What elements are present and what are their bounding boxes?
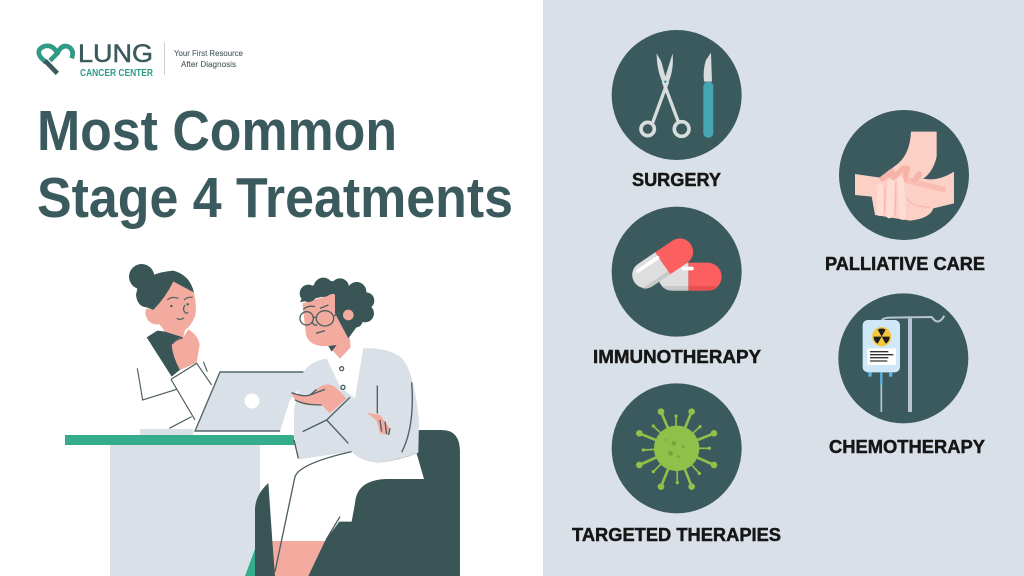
- patient hands: [291, 385, 390, 435]
- label: CHEMOTHERAPY: [829, 437, 985, 457]
- icon: heart logo: [39, 46, 73, 73]
- IV pole: [881, 316, 944, 412]
- lower hand: [855, 172, 954, 221]
- illustration: consultation scene: [65, 264, 460, 576]
- logo tagline: Your First Resource: [174, 48, 243, 58]
- radiation symbol: [872, 327, 891, 346]
- treatment: immunotherapy: [593, 207, 761, 367]
- treatment: chemotherapy: [829, 293, 985, 457]
- label: SURGERY: [632, 170, 721, 190]
- patient neck and face: [302, 293, 351, 359]
- patient buttons: [340, 367, 345, 389]
- doctor: [129, 264, 212, 435]
- patient skirt: [268, 452, 424, 541]
- doctor shirt: [147, 331, 183, 377]
- title: Most Common: [37, 99, 397, 163]
- icon: capsules: [612, 207, 742, 337]
- icon: virus: [612, 383, 742, 513]
- logo tagline: After Diagnosis: [181, 59, 236, 69]
- patient hair: [300, 278, 374, 338]
- doctor face: [145, 282, 196, 337]
- label: IMMUNOTHERAPY: [593, 347, 761, 367]
- desk top: [65, 435, 300, 445]
- scissors: [641, 53, 689, 136]
- logo subtitle: CANCER CENTER: [80, 68, 154, 79]
- capsule back: [688, 263, 722, 291]
- logo: [39, 40, 243, 79]
- upper hand: [880, 132, 937, 179]
- panel: treatments background: [543, 0, 1024, 576]
- patient: [255, 278, 460, 576]
- fingers: [880, 168, 943, 217]
- desk paper: [140, 429, 193, 435]
- chair: [255, 430, 460, 576]
- logo wordmark: LUNG: [78, 40, 153, 68]
- treatment: palliative care: [825, 110, 985, 274]
- icon: surgical tools: [612, 30, 742, 160]
- scalpel: [704, 53, 712, 82]
- label: PALLIATIVE CARE: [825, 254, 985, 274]
- desk base: [110, 445, 260, 576]
- patient neck shadow: [328, 345, 337, 352]
- icon: holding hands: [839, 110, 969, 240]
- title: Stage 4 Treatments: [37, 166, 513, 230]
- patient ear: [343, 310, 354, 320]
- laptop: [195, 372, 305, 431]
- doctor hair: [129, 264, 194, 310]
- patient collar: [279, 348, 363, 436]
- treatment: targeted therapies: [572, 383, 781, 545]
- bag label: [867, 348, 896, 365]
- doctor face lines: [137, 297, 212, 428]
- patient line details: [275, 305, 412, 572]
- IV bag: [863, 320, 900, 372]
- doctor hand: [172, 329, 200, 370]
- capsule front: [627, 233, 698, 293]
- patient leg: [272, 541, 325, 576]
- desk floor accent: [245, 549, 255, 576]
- label: TARGETED THERAPIES: [572, 525, 781, 545]
- icon: IV drip: [838, 293, 968, 423]
- patient jacket: [294, 348, 419, 462]
- treatment: surgery: [612, 30, 742, 190]
